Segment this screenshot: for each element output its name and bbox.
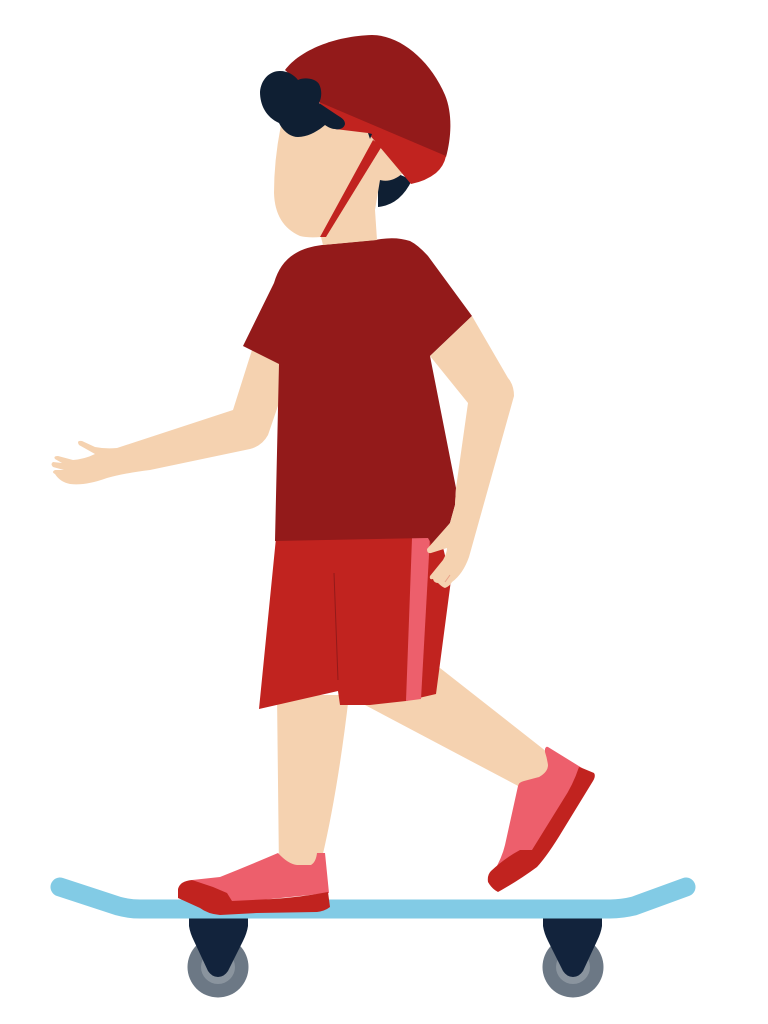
helmet dome [285,35,450,157]
shorts crease [334,573,338,680]
shorts [259,535,451,709]
front shoe sole [178,880,330,915]
board deck [60,887,686,909]
back shoe upper [493,747,582,873]
shirt [243,238,472,545]
front leg [277,695,349,870]
shorts pink stripe [406,537,430,701]
back shoe [488,747,595,892]
right arm and hand [427,316,514,588]
left wheel [188,936,248,998]
back hair [378,165,412,207]
shorts body [259,535,451,709]
left truck [189,917,248,977]
back leg [365,668,552,787]
skateboard [60,887,686,998]
head [260,35,450,245]
front shoe [178,853,330,915]
right truck [543,917,602,977]
curly hair [260,71,345,137]
front shoe upper [192,853,329,903]
hair tuft [368,133,372,139]
helmet brim band [319,102,446,184]
chin strap [320,140,382,237]
right wheel [542,936,604,998]
finger crease [445,575,450,582]
face and neck [274,122,403,245]
back shoe sole [488,767,595,892]
left arm [52,350,280,484]
right arm [427,316,514,588]
